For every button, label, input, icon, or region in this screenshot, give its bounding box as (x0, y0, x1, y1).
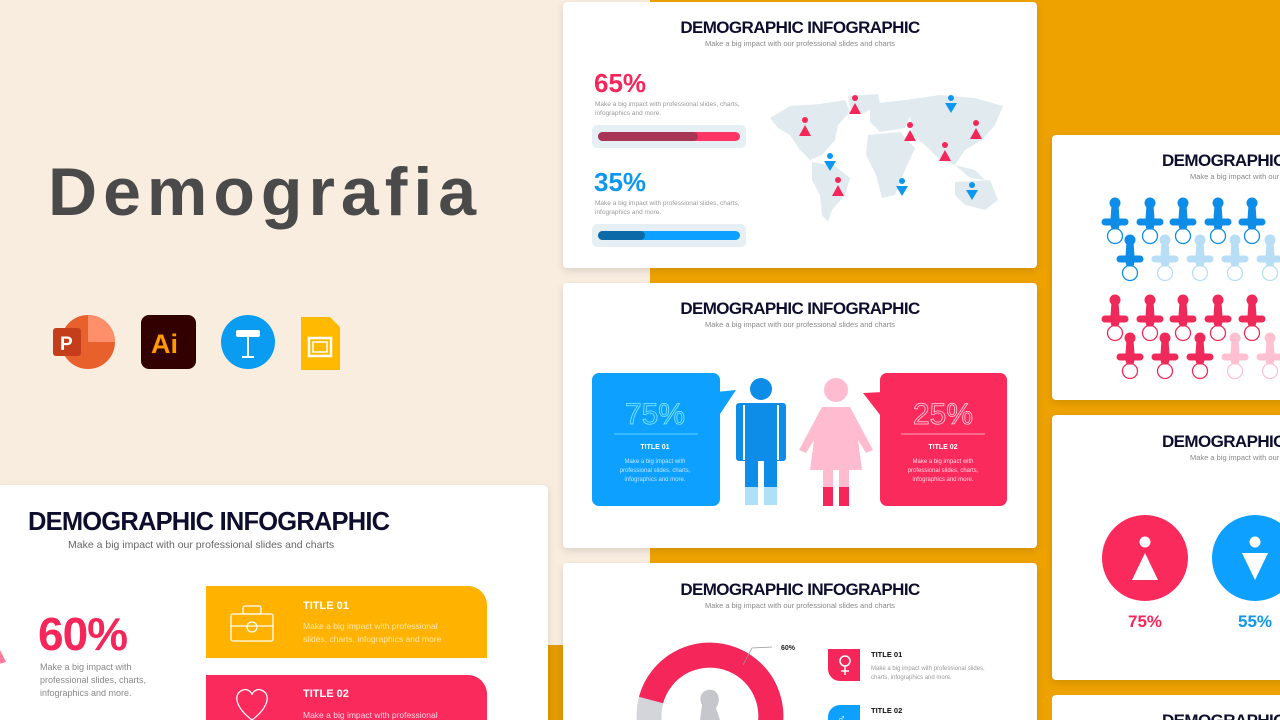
item: title 02 (828, 705, 902, 720)
heading (1163, 436, 1280, 462)
donut chart (649, 645, 796, 720)
card: title 01: slides, charts, infographics and more (303, 634, 442, 644)
callout: male 75%: TITLE 01 (640, 444, 670, 451)
donut chart: 60% (781, 645, 796, 652)
map markers (799, 95, 982, 200)
callout: female 25%: professional slides, charts, (908, 468, 979, 474)
stat: female 75% (1102, 515, 1188, 631)
stat 65%: infographics and more. (595, 110, 661, 117)
callout: male 75%: professional slides, charts, (620, 468, 691, 474)
card: title 02 (206, 675, 487, 720)
panel: left bottom slide (0, 485, 548, 720)
stat: female 75%: 75% (1128, 612, 1162, 631)
icon: male figure (736, 378, 786, 505)
card: title 01: Make a big impact with professional (303, 621, 438, 631)
card: title 02: TITLE 02 (303, 688, 349, 700)
panel: donut slide (563, 563, 1037, 720)
callout: male 75%: infographics and more. (624, 477, 686, 483)
title: Demografia: Demografia (48, 154, 482, 230)
panel: gender circles slide (1052, 415, 1280, 680)
heading (30, 512, 390, 550)
heading: DEMOGRAPHIC INFOGRAPHIC (680, 299, 920, 318)
stat 35%: 35% (594, 167, 646, 197)
callout: male 75%: 75% (625, 398, 685, 431)
stat 60%: professional slides, charts, (40, 675, 146, 685)
icon: illustrator: Ai (151, 329, 178, 359)
item: title 01 (828, 649, 985, 681)
card: title 01: TITLE 01 (303, 600, 349, 612)
icon: powerpoint: P (60, 334, 73, 355)
callout: male 75%: Make a big impact with (624, 459, 686, 465)
callout: male 75% (592, 373, 736, 506)
world map (770, 94, 1003, 222)
stat 60%: Make a big impact with (40, 662, 132, 672)
decorative pink shape (0, 650, 6, 664)
heading (682, 302, 920, 328)
callout: female 25%: 25% (913, 398, 973, 431)
card: title 02: Make a big impact with professional (303, 710, 438, 720)
stat 60% (40, 618, 146, 698)
panel: pacifier slide (1052, 135, 1280, 400)
heading (1163, 154, 1280, 180)
icon: illustrator (141, 315, 196, 369)
stat 65%: 65% (594, 68, 646, 98)
stat 35% (592, 167, 746, 247)
item: title 02: TITLE 02 (871, 706, 902, 715)
panel: gender slide (563, 283, 1037, 548)
callout: female 25% (863, 373, 1007, 506)
pacifier grid (1102, 198, 1280, 378)
heading: Make a big impact with our professional slides and charts (705, 601, 895, 610)
stat 60%: 60% (38, 608, 127, 660)
heading: DEMOGRAPHIC INFOGRAPHIC (680, 580, 920, 599)
item: title 01: Make a big impact with professional slides, (871, 666, 985, 672)
panel: world map slide (563, 2, 1037, 268)
heading: Make a big impact with our professional slides and charts (705, 39, 895, 48)
heading (682, 584, 920, 610)
stat 35%: infographics and more. (595, 209, 661, 216)
panel: partial bottom slide (1052, 695, 1280, 720)
heading: Make a big impact with our professional slides and charts (68, 539, 334, 551)
callout: female 25%: Make a big impact with (912, 459, 974, 465)
stat 60%: infographics and more. (40, 688, 132, 698)
callout: female 25%: infographics and more. (912, 477, 974, 483)
icon: powerpoint (53, 315, 115, 369)
heading (682, 22, 920, 48)
stat: male 55% (1212, 515, 1280, 631)
icon: female figure (799, 378, 873, 506)
stat: male 55%: 55% (1238, 612, 1272, 631)
icons: app logos (53, 315, 340, 370)
stat 65% (592, 68, 746, 148)
callout: female 25%: TITLE 02 (928, 444, 958, 451)
item: title 01: TITLE 01 (871, 650, 902, 659)
heading: Make a big impact with our professional slides and charts (705, 320, 895, 329)
card: title 01 (206, 586, 487, 658)
stat 65%: Make a big impact with professional slides, charts, (595, 101, 740, 108)
item: title 01: charts, infographics and more. (871, 675, 952, 681)
icon: keynote (221, 315, 275, 369)
heading: DEMOGRAPHIC INFOGRAPHIC (28, 508, 390, 536)
icon: google slides (301, 317, 340, 370)
stat 35%: Make a big impact with professional slides, charts, (595, 200, 740, 207)
heading: DEMOGRAPHIC INFOGRAPHIC (680, 18, 920, 37)
